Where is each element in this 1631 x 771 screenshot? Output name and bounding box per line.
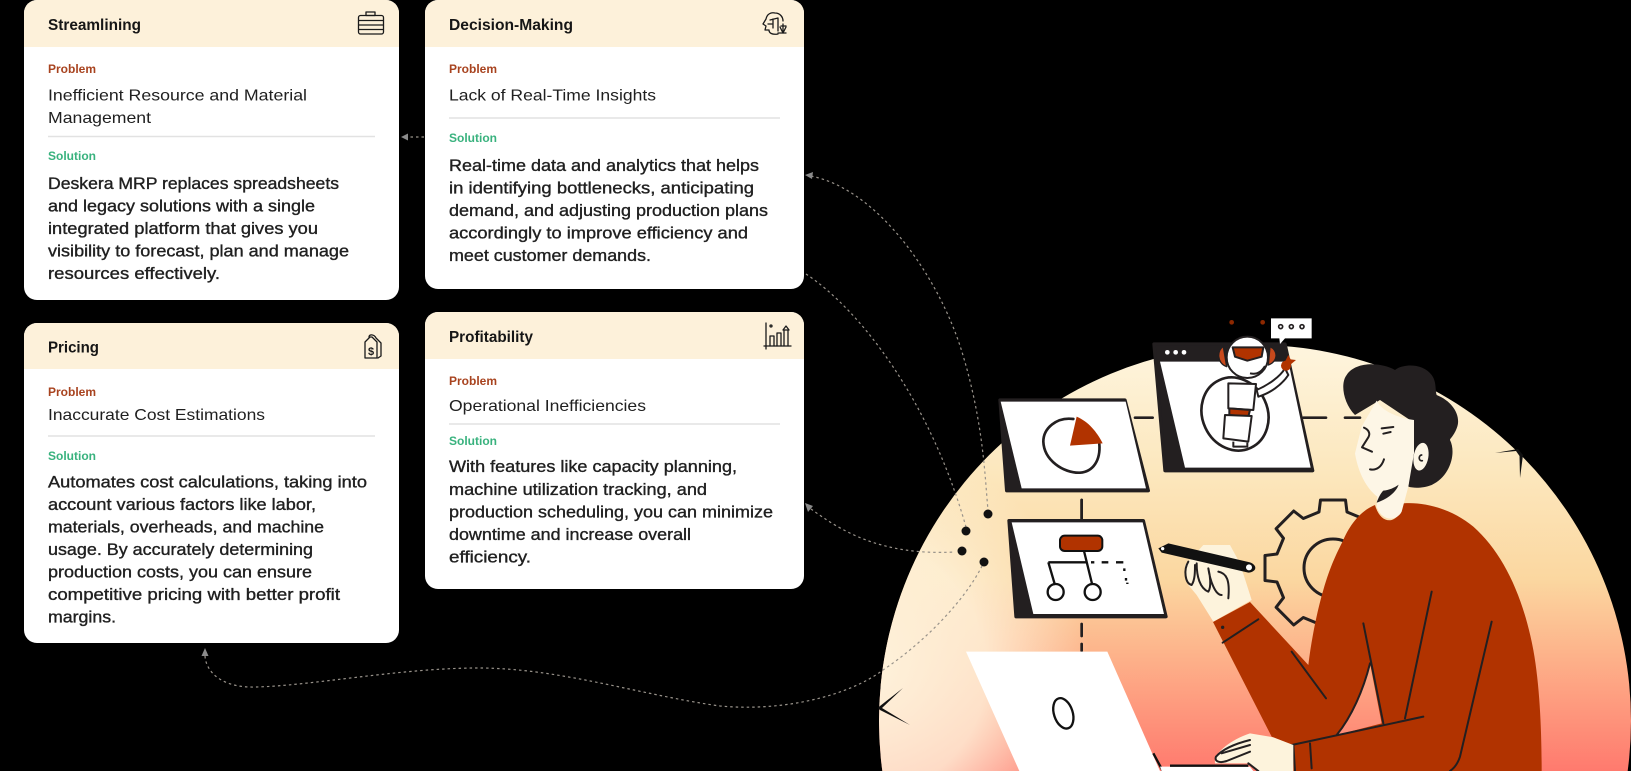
solution text: With features like capacity planning, (449, 458, 737, 476)
connector nodes (958, 510, 992, 566)
arrow: from Decision-Making edge (806, 274, 966, 527)
solution text: demand, and adjusting production plans (449, 202, 768, 220)
arrow: to Decision-Making (805, 172, 988, 510)
icon: briefcase list (358, 12, 384, 34)
panel: Decision-Making (425, 0, 804, 289)
sparkle: lower left (878, 688, 910, 725)
solution text: accordingly to improve efficiency and (449, 224, 748, 242)
problem label: Problem (449, 62, 497, 76)
panel: Streamlining (24, 0, 399, 300)
solution text: efficiency. (449, 549, 531, 567)
face (1355, 401, 1414, 519)
sweater (1213, 503, 1542, 771)
arrow: to Profitability (805, 503, 955, 552)
heading: Pricing: Pricing (48, 340, 99, 357)
solution text: Automates cost calculations, taking into (48, 474, 367, 492)
icon: head with scales (763, 13, 786, 34)
problem text: Inefficient Resource and Material (48, 88, 307, 104)
ear (1411, 442, 1431, 472)
problem text: Operational Inefficiencies (449, 398, 646, 415)
cuff (1221, 619, 1258, 643)
problem label: Problem (48, 385, 96, 399)
hair (1343, 364, 1458, 488)
arrow: to Pricing (202, 566, 982, 707)
illustration: tablet, laptop, hands (966, 500, 1293, 771)
solution label: Solution (449, 131, 497, 145)
problem text (48, 88, 307, 127)
fingers (1185, 562, 1229, 598)
solution text: production scheduling, you can minimize (449, 503, 773, 521)
icon: price tag: $ (368, 346, 374, 358)
solution text: visibility to forecast, plan and manage (48, 242, 349, 260)
solution text: Real-time data and analytics that helps (449, 157, 759, 175)
solution text: competitive pricing with better profit (48, 586, 341, 604)
robot (1190, 337, 1288, 462)
robot hand (1281, 355, 1296, 371)
pen (1158, 543, 1255, 573)
speech bubble (1271, 318, 1312, 344)
heading: Streamlining: Streamlining (48, 17, 141, 34)
problem label: Problem (449, 374, 497, 388)
panel: Pricing (24, 323, 399, 643)
org chart tablet (1009, 521, 1166, 617)
solution text: usage. By accurately determining (48, 541, 313, 559)
solution text: resources effectively. (48, 265, 220, 283)
problem text: Inaccurate Cost Estimations (48, 407, 265, 424)
illustration: gear (1265, 500, 1401, 636)
solution text: machine utilization tracking, and (449, 481, 707, 499)
solution text: and legacy solutions with a single (48, 198, 315, 216)
solution text (449, 458, 773, 567)
icon: price tag (365, 335, 381, 358)
solution label: Solution (48, 449, 96, 463)
robot window (1154, 344, 1313, 471)
facial features (1362, 427, 1393, 470)
solution text: account various factors like labor, (48, 496, 316, 514)
solution text: margins. (48, 609, 116, 627)
solution text (48, 175, 349, 283)
problem label: Problem (48, 62, 96, 76)
solution text: materials, overheads, and machine (48, 519, 324, 537)
solution text (48, 474, 367, 627)
lower hand (1215, 733, 1293, 771)
problem text: Management (48, 110, 152, 127)
chart connector (1078, 500, 1086, 651)
solution label: Solution (48, 149, 96, 163)
solution text: integrated platform that gives you (48, 220, 318, 238)
solution text: in identifying bottlenecks, anticipating (449, 180, 754, 198)
solution text (449, 157, 768, 265)
illustration background circle (870, 340, 1631, 771)
pie tablet (1000, 400, 1148, 491)
neck shadow (1377, 485, 1399, 503)
laptop (966, 652, 1253, 771)
arrow: Decision-Making to Streamlining (401, 134, 424, 140)
heading: Profitability: Profitability (449, 329, 533, 346)
solution text: downtime and increase overall (449, 526, 691, 544)
solution text: meet customer demands. (449, 247, 651, 265)
sparkle: upper right (1495, 449, 1523, 478)
illustration: sweater and person (1213, 364, 1542, 771)
heading: Decision-Making: Decision-Making (449, 17, 573, 34)
upper hand (1185, 545, 1252, 622)
sweater folds (1292, 592, 1492, 771)
solution label: Solution (449, 434, 497, 448)
icon: bar chart (764, 323, 791, 349)
sparks (1229, 320, 1265, 325)
problem text: Lack of Real-Time Insights (449, 88, 656, 104)
solution text: production costs, you can ensure (48, 564, 312, 582)
panel: Profitability (425, 312, 804, 589)
illustration: pie chart tablet and robot window (1000, 318, 1360, 518)
solution text: Deskera MRP replaces spreadsheets (48, 175, 339, 193)
